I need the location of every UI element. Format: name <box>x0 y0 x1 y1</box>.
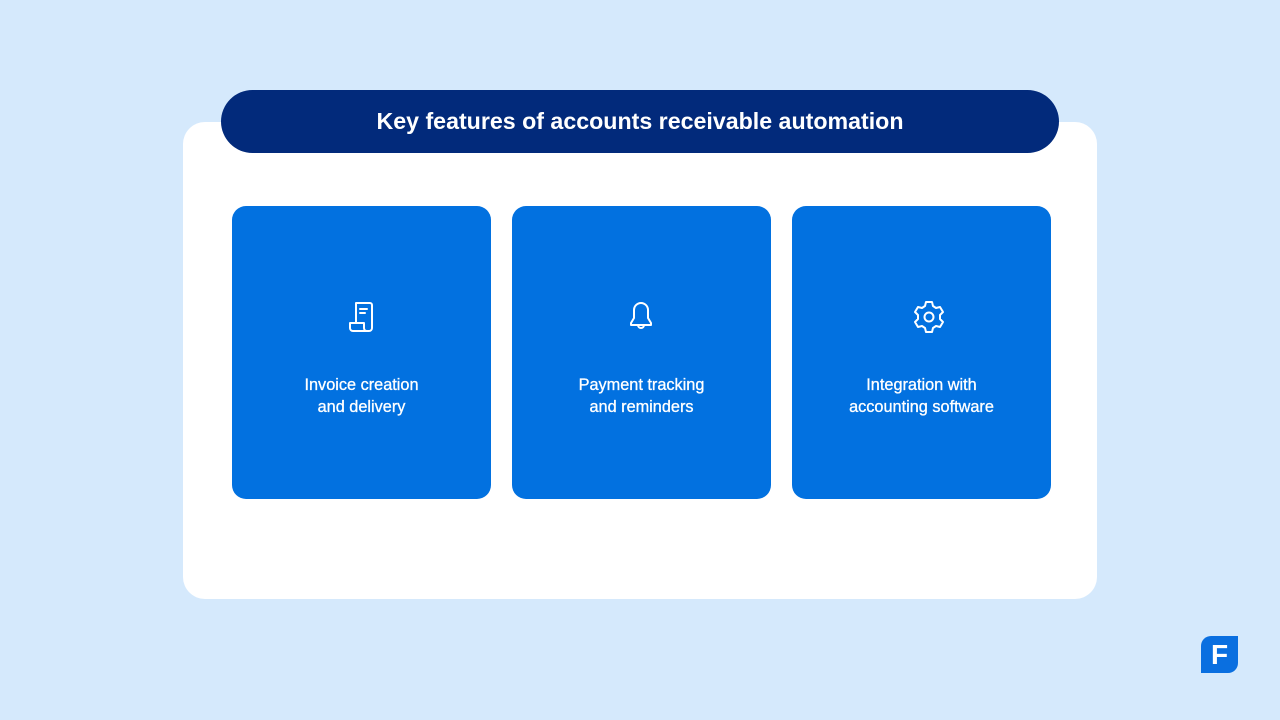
text: and reminders <box>589 398 694 416</box>
text: Integration with <box>866 376 977 394</box>
text: and delivery <box>318 398 405 416</box>
text: Payment tracking <box>579 376 704 394</box>
title <box>221 90 1059 153</box>
title: Key features of accounts receivable automation <box>376 108 904 134</box>
text: Invoice creation <box>304 376 419 394</box>
text <box>849 376 994 416</box>
icon: invoice <box>349 302 373 332</box>
icon: gear <box>914 301 944 333</box>
icon: bell <box>630 302 652 329</box>
logo: F <box>1211 639 1228 670</box>
logo <box>1201 636 1238 673</box>
panel: invoice <box>232 206 491 499</box>
card <box>183 122 1097 599</box>
text <box>579 376 704 416</box>
panel: payment <box>512 206 771 499</box>
panel: integration <box>792 206 1051 499</box>
text <box>304 376 419 416</box>
text: accounting software <box>849 398 994 416</box>
